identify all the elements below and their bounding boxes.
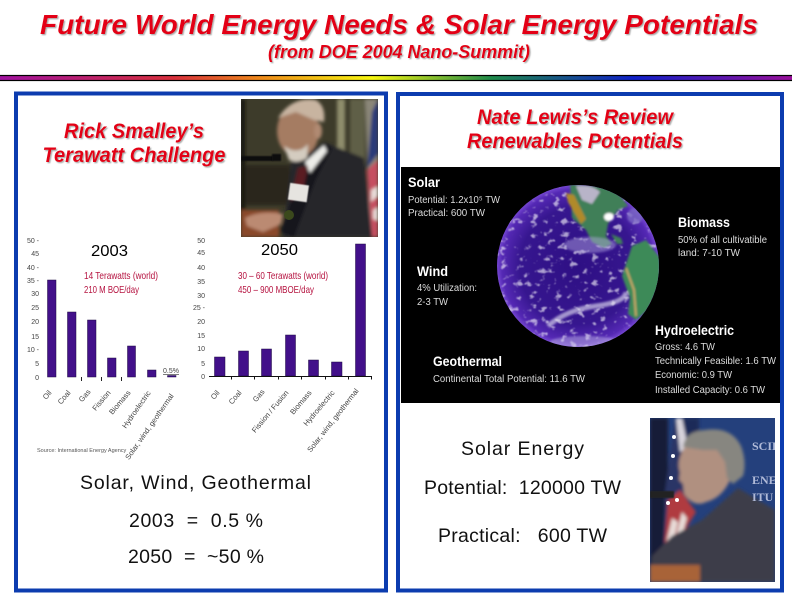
callout 2050: 450 – 900 MBOE/day: [238, 284, 315, 296]
y axis labels 2003: [27, 238, 40, 382]
heading: Rick Smalley: Rick Smalley’s: [64, 120, 204, 143]
text: Solar Energy: Solar Energy: [461, 438, 584, 460]
text: Practical: Practical: 600 TW: [438, 525, 608, 547]
y axis labels 2050: 45: [197, 250, 205, 257]
label: Hydroelectric: Gross: 4.6 TW: [655, 342, 716, 353]
text: Potential: Potential: 120000 TW: [424, 477, 622, 499]
y axis labels 2003: 10 -: [27, 347, 40, 354]
label: Geothermal: Geothermal: [433, 353, 502, 369]
category labels 2050: Biomass: [288, 388, 314, 416]
category labels 2050: Coal: [227, 388, 244, 406]
heading: Nate Lewis: Nate Lewis’s Review: [477, 106, 675, 129]
label 2050: 2050: [261, 242, 298, 259]
category labels 2050: [209, 386, 361, 454]
y axis labels 2003: 50 -: [27, 238, 40, 245]
rainbow divider: [0, 76, 792, 80]
photo: Rick Smalley: [241, 99, 378, 237]
text: 2003 share: 2003 = 0.5 %: [129, 510, 263, 532]
y axis labels 2003: 35 -: [27, 278, 40, 285]
label: Geothermal: Continental Total Potential: 11.6 TW: [433, 374, 586, 385]
callout 2003: 14 Terawatts (world): [84, 270, 158, 282]
y axis labels 2050: 50: [197, 238, 205, 245]
label: Hydroelectric: Technically Feasible: 1.6 TW: [655, 356, 777, 367]
label 2003: 2003: [91, 243, 128, 260]
label: Hydroelectric: Economic: 0.9 TW: [655, 370, 733, 381]
label: Hydroelectric: [655, 322, 777, 396]
panel: right: [398, 94, 782, 590]
bars 2050: [214, 244, 366, 376]
y axis labels 2050: 40: [197, 265, 205, 272]
category labels 2050: Hydroelectric: [302, 388, 337, 428]
globe figure: renewables potentials: [401, 167, 780, 403]
subtitle: (from DOE 2004 Nano-Summit): [268, 42, 530, 62]
y axis labels 2050: 20: [197, 319, 205, 326]
category labels 2003: Coal: [56, 388, 73, 406]
label: Wind: [417, 263, 477, 308]
heading: Rick Smalley: [42, 120, 226, 167]
y axis labels 2003: 25: [31, 305, 39, 312]
category labels 2050: Oil: [209, 388, 222, 401]
label: Biomass: [678, 214, 767, 259]
banner lettering: ENE: [752, 473, 777, 487]
title: Future World Energy Needs & Solar Energy Potentials: [40, 9, 758, 40]
heading: Nate Lewis: [467, 106, 683, 153]
source note: Source: International Energy Agency: [37, 448, 127, 454]
axis ticks 2003: [82, 377, 122, 381]
y axis labels 2050: 35: [197, 279, 205, 286]
category labels 2050: Fission / Fusion: [250, 389, 291, 435]
panel: left: [16, 94, 386, 590]
label: Solar: Practical: 600 TW: [408, 208, 486, 219]
category labels 2003: Solar, wind, geothermal: [123, 392, 176, 461]
heading: Nate Lewis: Renewables Potentials: [467, 130, 683, 153]
category labels 2003: Gas: [77, 387, 93, 404]
bars 2003: [48, 280, 176, 377]
label: Biomass: 50% of all cultivatible: [678, 235, 767, 246]
x axis 2050: [209, 376, 372, 380]
y axis labels 2050: 0: [201, 374, 205, 381]
label: Solar: Solar: [408, 174, 441, 190]
heading: Rick Smalley: Terawatt Challenge: [42, 144, 226, 167]
label: Geothermal: [433, 353, 586, 385]
category labels 2003: Biomass: [107, 388, 133, 416]
label: Biomass: land: 7-10 TW: [678, 248, 741, 259]
label: Hydroelectric: Hydroelectric: [655, 322, 734, 338]
y axis labels 2003: 20: [31, 319, 39, 326]
y axis labels 2050: [193, 238, 206, 381]
label: Wind: 2-3 TW: [417, 297, 449, 308]
banner lettering: ITU: [752, 490, 774, 504]
y axis labels 2003: 40 -: [27, 265, 40, 272]
y axis labels 2003: 30: [31, 291, 39, 298]
y axis labels 2003: 5: [35, 361, 39, 368]
chart: 2050 energy mix: [193, 238, 372, 454]
category labels 2050: Gas: [251, 387, 267, 404]
label: Solar: [408, 174, 501, 219]
y axis labels 2003: 15: [31, 334, 39, 341]
category labels 2050: Solar, wind, geothermal: [305, 386, 361, 454]
y axis labels 2050: 5: [201, 361, 205, 368]
callout 2003: 210 M BOE/day: [84, 284, 140, 296]
y axis labels 2050: 10: [197, 346, 205, 353]
banner lettering: SCIEN: [752, 439, 789, 453]
photo: Nate Lewis: [650, 418, 775, 582]
label: Wind: 4% Utilization:: [417, 283, 477, 294]
y axis labels 2050: 25 -: [193, 305, 206, 312]
chart: 2003 energy mix: [27, 238, 179, 461]
banner lettering: [752, 442, 775, 501]
y axis labels 2050: 30: [197, 293, 205, 300]
text: Solar Wind Geothermal: Solar, Wind, Geothermal: [80, 472, 311, 494]
category labels 2003: Fission: [90, 389, 113, 412]
label: Solar: Potential: 1.2x10⁵ TW: [408, 195, 501, 206]
label: Wind: Wind: [417, 263, 448, 279]
icon: earth globe: [497, 184, 660, 348]
text: 2050 share: 2050 = ~50 %: [128, 546, 264, 568]
y axis labels 2050: 15: [197, 333, 205, 340]
category labels 2003: Oil: [41, 388, 54, 401]
category labels 2003: Hydroelectric: [120, 389, 153, 430]
category labels 2003: [41, 387, 176, 461]
y axis labels 2003: 45: [31, 251, 39, 258]
callout 2050: 30 – 60 Terawatts (world): [238, 270, 328, 282]
value label: 0.5%: [163, 368, 179, 375]
y axis labels 2003: 0: [35, 375, 39, 382]
label: Biomass: Biomass: [678, 214, 730, 230]
label: Hydroelectric: Installed Capacity: 0.6 TW: [655, 385, 766, 396]
